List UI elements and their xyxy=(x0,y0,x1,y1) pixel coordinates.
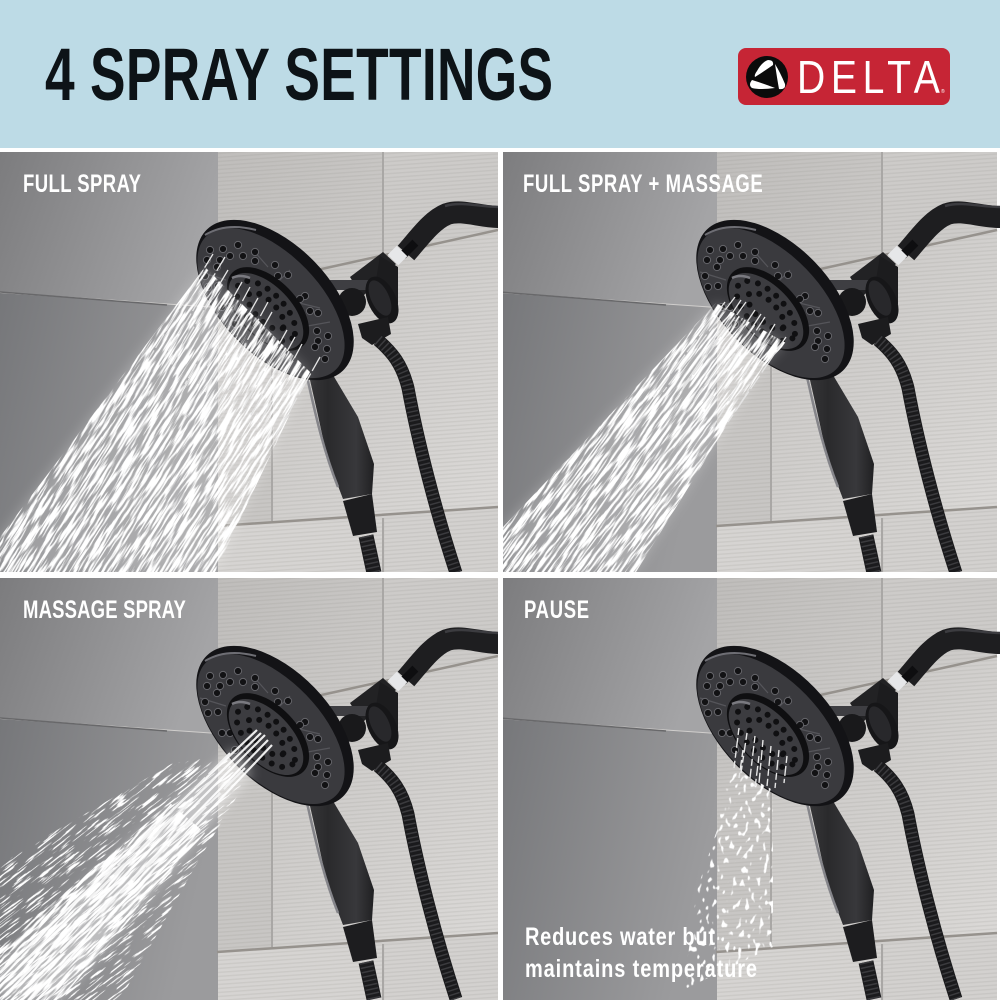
hose xyxy=(378,340,456,573)
header band xyxy=(0,0,1000,148)
hose xyxy=(878,766,956,999)
water spray xyxy=(503,297,786,572)
logo: Delta: DELTA xyxy=(797,52,940,104)
panel: full spray + massage xyxy=(499,152,1000,574)
shower arm and mount xyxy=(830,630,1000,771)
shower head xyxy=(196,646,354,806)
logo: Delta: ® xyxy=(941,88,945,95)
hose xyxy=(378,766,456,999)
shower arm and mount xyxy=(330,204,500,345)
tiled wall xyxy=(499,152,997,574)
label: massage spray: MASSAGE SPRAY xyxy=(23,595,186,624)
tiled wall xyxy=(0,152,498,574)
water trickle xyxy=(683,728,787,990)
shower head xyxy=(696,646,854,806)
caption: pause description: Reduces water but xyxy=(525,923,715,951)
panel: pause xyxy=(499,578,1000,1000)
panel: massage spray xyxy=(0,578,500,1000)
label: full spray: FULL SPRAY xyxy=(23,169,141,198)
hand shower handle xyxy=(803,352,877,573)
logo: Delta xyxy=(738,48,950,105)
shower arm and mount xyxy=(330,630,500,771)
label: full spray + massage: FULL SPRAY + MASSAGE xyxy=(523,169,763,198)
water jets xyxy=(0,730,272,1000)
shower head xyxy=(196,220,354,380)
hand shower handle xyxy=(303,778,377,999)
hand shower handle xyxy=(303,352,377,573)
hose xyxy=(878,340,956,573)
caption: pause description: maintains temperature xyxy=(525,955,757,983)
caption: pause description xyxy=(525,923,757,983)
shower arm and mount xyxy=(830,204,1000,345)
shower head xyxy=(696,220,854,380)
panel: full spray xyxy=(0,152,500,574)
title: 4 SPRAY SETTINGS xyxy=(45,33,553,116)
hand shower handle xyxy=(803,778,877,999)
label: pause: PAUSE xyxy=(524,595,589,624)
tiled wall xyxy=(0,578,498,1000)
water spray xyxy=(0,254,320,572)
tiled wall xyxy=(499,578,997,1000)
